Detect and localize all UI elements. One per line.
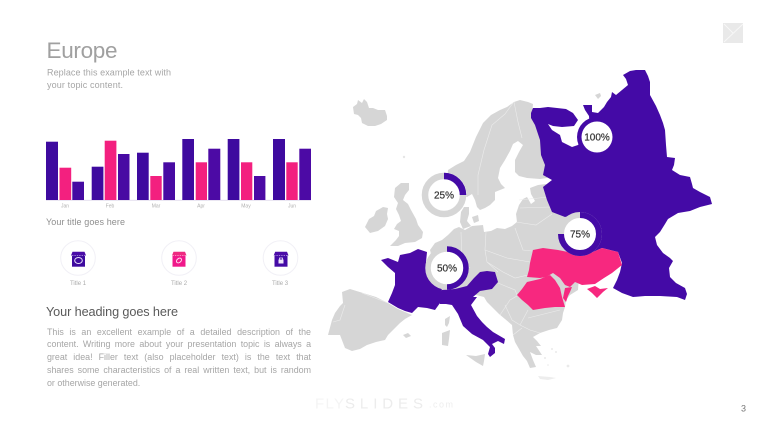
map: Italy, Switzerland and Austria	[437, 271, 505, 357]
Iceland	[353, 99, 387, 126]
map: country borders	[333, 102, 560, 335]
icon: store 2	[162, 241, 196, 275]
description paragraph: content. Writing more about your presentation topic is always a	[47, 339, 311, 349]
Faroe islands	[403, 156, 405, 158]
icon: store 1	[61, 241, 95, 275]
donut: 50%	[428, 249, 466, 287]
month labels: Jan	[61, 204, 69, 210]
map: Odesa coast	[563, 287, 572, 302]
month labels: Mar	[152, 204, 161, 210]
map: France	[381, 249, 442, 313]
subtitle text: Replace this example text with	[47, 68, 171, 78]
Scandinavia and Finland	[446, 100, 552, 210]
chart title: Your title goes here	[46, 217, 125, 227]
description paragraph	[47, 326, 312, 388]
Denmark	[460, 207, 471, 229]
label: Title 2: Title 2	[171, 281, 188, 287]
Sicily	[466, 354, 485, 366]
donut: 75%	[561, 215, 599, 253]
donut: 100%: 100%	[584, 132, 610, 144]
month labels: May	[241, 204, 251, 210]
Balearic islands	[403, 333, 411, 338]
Crete	[538, 376, 556, 380]
group: Jan	[46, 142, 84, 200]
bar chart	[46, 139, 311, 210]
title: Europe	[46, 38, 118, 63]
month labels	[61, 204, 296, 210]
map: Romania	[517, 275, 565, 310]
map: Russia	[531, 70, 712, 300]
Spain and Portugal	[328, 289, 412, 351]
description paragraph: This is an excellent example of a detailed description of the	[47, 326, 311, 336]
month labels: Apr	[197, 204, 205, 210]
description paragraph: or otherwise generated.	[47, 378, 140, 388]
page number: 3	[741, 404, 746, 414]
donut: 25%	[422, 172, 466, 218]
month labels: Feb	[106, 204, 115, 210]
Sardinia	[442, 330, 450, 346]
group: May	[228, 139, 265, 200]
group: Apr	[182, 139, 220, 200]
watermark: FLY	[315, 396, 344, 412]
Corsica	[445, 316, 450, 327]
Great Britain	[390, 183, 423, 246]
map: Crimea	[587, 286, 608, 298]
group: Mar	[137, 153, 175, 200]
Kolguev island	[595, 93, 601, 99]
donut: 75%: 75%	[570, 230, 590, 241]
label: Title 1: Title 1	[70, 281, 87, 287]
watermark: .com	[429, 400, 453, 410]
logo square	[723, 23, 743, 43]
map: grey countries	[328, 93, 601, 380]
donut: 25%: 25%	[434, 191, 454, 202]
label: Title 3: Title 3	[272, 281, 289, 287]
donut: 100%	[577, 117, 617, 157]
map of Europe	[328, 70, 712, 380]
watermark	[315, 396, 453, 412]
description paragraph: shares some characteristics of a real written text, but is random	[47, 365, 311, 375]
group: Jun	[273, 139, 311, 200]
group: Feb	[92, 141, 130, 200]
watermark: SLIDES	[345, 396, 423, 412]
icon: store 3	[263, 241, 298, 275]
month labels: Jun	[288, 204, 296, 210]
heading: Your heading goes here	[46, 305, 178, 319]
Aegean islands	[544, 348, 569, 367]
Ireland	[365, 207, 388, 233]
subtitle text: your topic content.	[47, 80, 123, 90]
description paragraph: great idea! Filler text (also placeholder text) is the text that	[47, 352, 311, 362]
donut: 50%: 50%	[437, 264, 457, 275]
Continental Europe	[430, 184, 590, 368]
map: Ukraine	[527, 248, 622, 287]
